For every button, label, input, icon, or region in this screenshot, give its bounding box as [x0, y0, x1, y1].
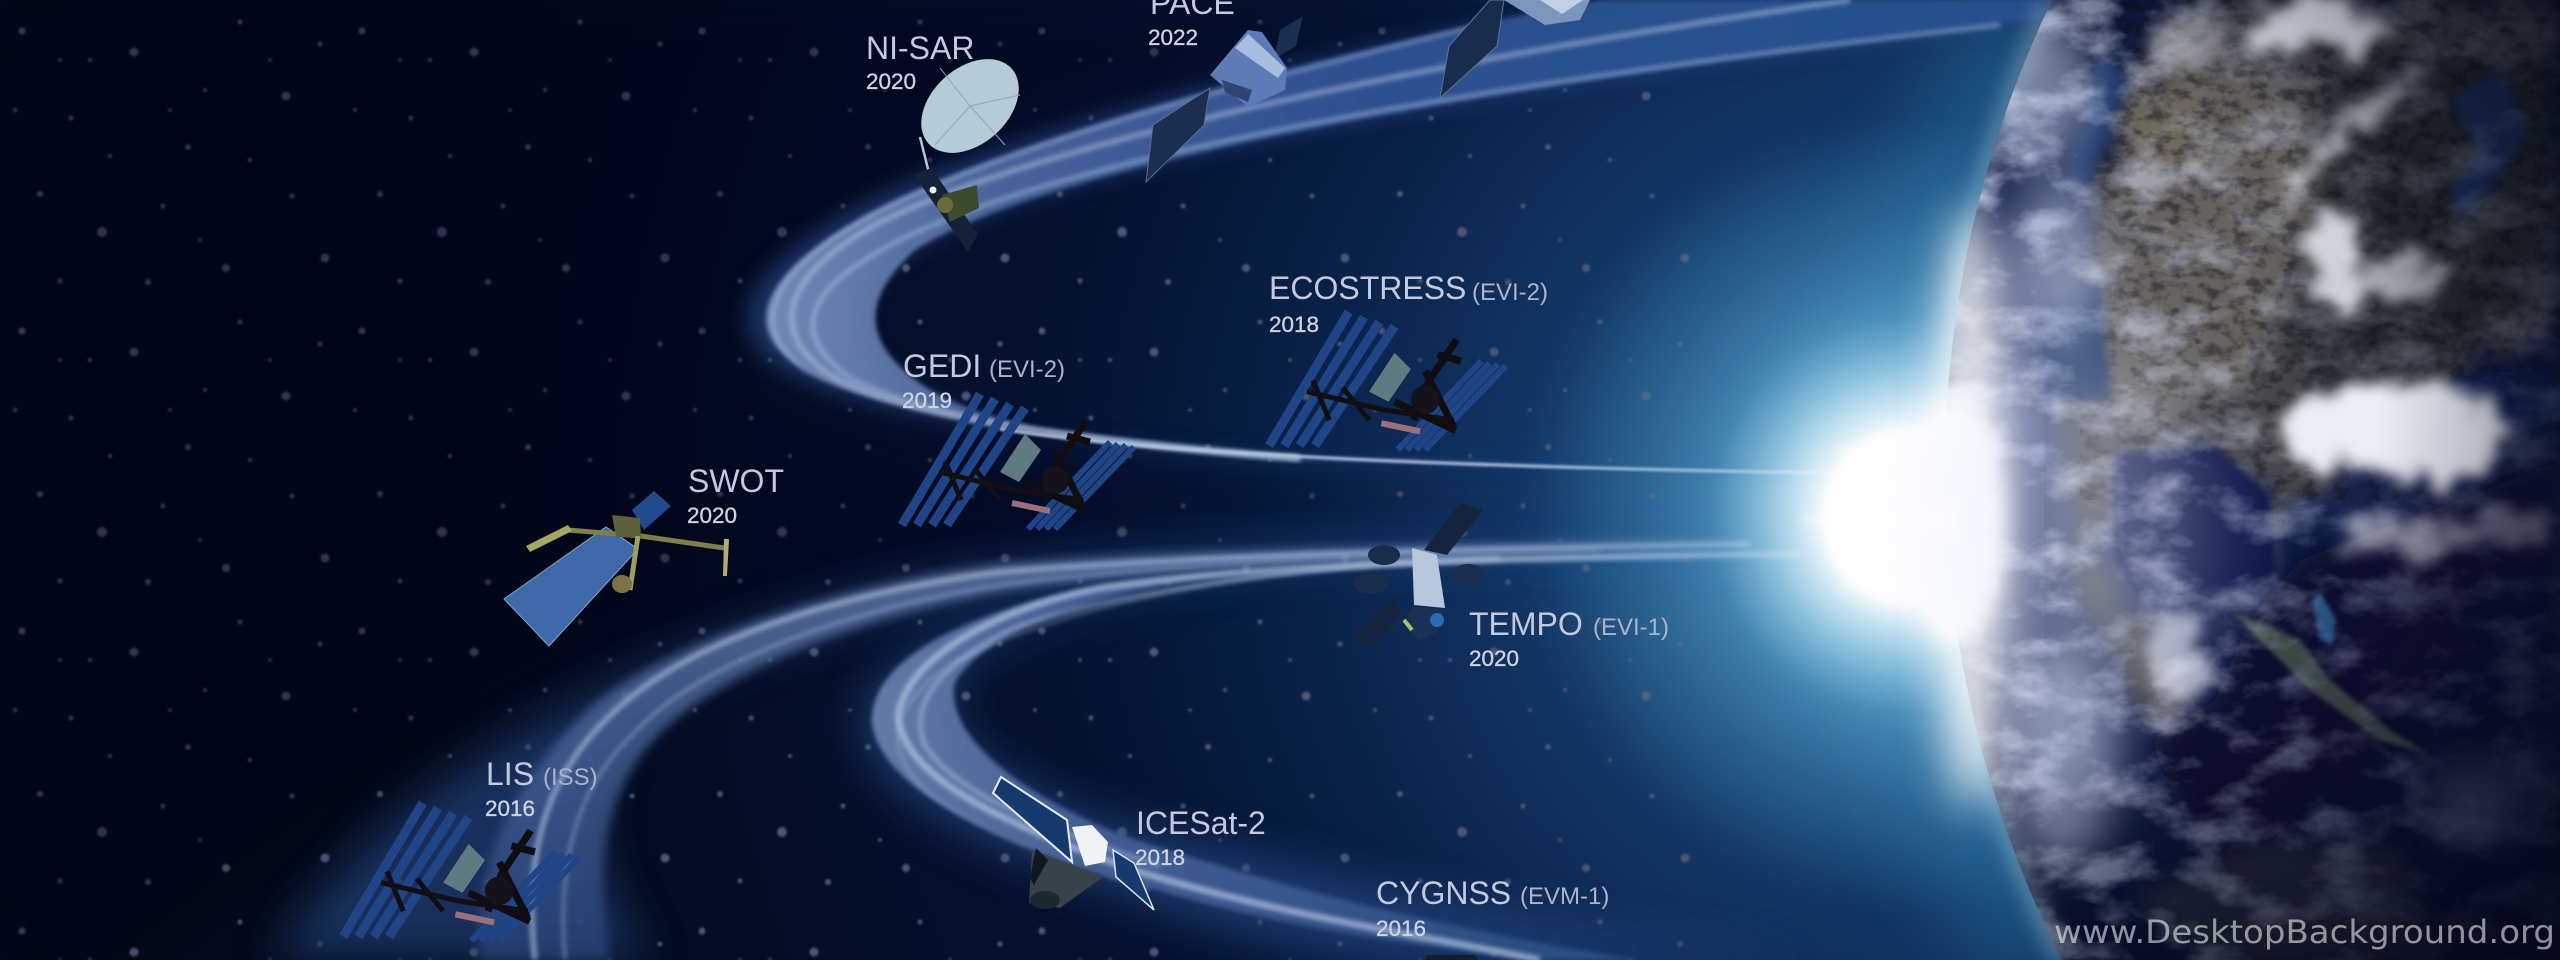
label: CYGNSS (EVM-1) 2016: 2016	[1376, 916, 1426, 941]
earth: fine terrain texture	[2080, 0, 2560, 500]
dark space above the upper orbit	[0, 0, 1700, 960]
label: CYGNSS (EVM-1) 2016: (EVM-1)	[1520, 883, 1609, 910]
earth: Gulf of Mexico, Caribbean and Atlantic	[2040, 50, 2560, 960]
satellite: NI-SAR	[903, 40, 1037, 252]
label: NI-SAR 2020: 2020	[866, 69, 916, 94]
earth: night-side shading	[2001, 0, 2560, 960]
label: NI-SAR 2020	[866, 30, 974, 94]
label: TEMPO (EVI-1) 2020: 2020	[1469, 646, 1519, 671]
satellite: TEMPO	[1350, 503, 1485, 645]
label: PACE 2022: 2022	[1148, 25, 1198, 50]
label: CYGNSS (EVM-1) 2016	[1376, 875, 1609, 941]
earth: ocean base	[1940, 0, 2560, 960]
label: SWOT 2020	[687, 463, 784, 528]
label: LIS (ISS) 2016: (ISS)	[543, 764, 598, 791]
sun glow behind the limb	[1510, 115, 2310, 915]
satellite: GEDI on ISS	[902, 394, 1134, 529]
satellite: CYGNSS cropped at bottom	[1425, 955, 1478, 960]
satellite: ICESat-2	[993, 777, 1154, 910]
satellite: SWOT	[504, 491, 729, 646]
label: ECOSTRESS (EVI-2) 2018: (EVI-2)	[1472, 279, 1548, 306]
earth: North America landmass	[2060, 0, 2560, 790]
label: ECOSTRESS (EVI-2) 2018	[1269, 270, 1548, 337]
label: ICESat-2 2018: 2018	[1135, 845, 1185, 870]
earth: large cloud systems	[2148, 0, 2555, 700]
label: ECOSTRESS (EVI-2) 2018: 2018	[1269, 312, 1319, 337]
watermark: www.DesktopBackground.org	[2054, 913, 2555, 951]
earth: procedural cloud layer	[1900, 0, 2560, 960]
orbit: upper ribbon past NI-SAR and PACE to GEDI	[747, 0, 2060, 473]
satellite: PACE	[1146, 16, 1303, 182]
atmosphere limb glow	[1945, 0, 2062, 960]
label: GEDI (EVI-2) 2019: 2019	[902, 388, 952, 413]
label: LIS (ISS) 2016: LIS	[486, 756, 534, 792]
background: star field	[0, 0, 1700, 960]
orbit: lower-left ribbon past LIS	[270, 541, 1780, 960]
label: TEMPO (EVI-1) 2020: TEMPO	[1469, 606, 1583, 642]
orbit: lower ribbon past ICESat-2 and CYGNSS	[859, 551, 1800, 960]
label: LIS (ISS) 2016	[485, 756, 598, 821]
label: SWOT 2020: SWOT	[688, 463, 784, 499]
teal atmospheric glow along the limb	[1945, 0, 2062, 960]
earth: limb haze	[1990, 10, 2540, 870]
label: TEMPO (EVI-1) 2020: (EVI-1)	[1593, 614, 1669, 641]
label: CYGNSS (EVM-1) 2016: CYGNSS	[1376, 875, 1511, 911]
sun flare over the limb	[1800, 210, 2200, 810]
satellite: LIS on ISS	[343, 803, 580, 941]
label: LIS (ISS) 2016: 2016	[485, 796, 535, 821]
label: SWOT 2020: 2020	[687, 503, 737, 528]
label: ECOSTRESS (EVI-2) 2018: ECOSTRESS	[1269, 270, 1466, 306]
label: GEDI (EVI-2) 2019	[902, 348, 1065, 413]
satellite: ECOSTRESS on ISS	[1269, 312, 1506, 450]
label: ICESat-2 2018	[1135, 805, 1266, 870]
planet Earth	[1900, 0, 2560, 960]
label: PACE 2022	[1148, 0, 1235, 50]
satellite: unnamed spacecraft cropped at top	[1440, 0, 1590, 98]
label: GEDI (EVI-2) 2019: (EVI-2)	[989, 356, 1065, 383]
label: ICESat-2 2018: ICESat-2	[1136, 805, 1266, 841]
label: GEDI (EVI-2) 2019: GEDI	[903, 348, 981, 384]
label: NI-SAR 2020: NI-SAR	[866, 30, 974, 66]
label: TEMPO (EVI-1) 2020	[1469, 606, 1669, 671]
